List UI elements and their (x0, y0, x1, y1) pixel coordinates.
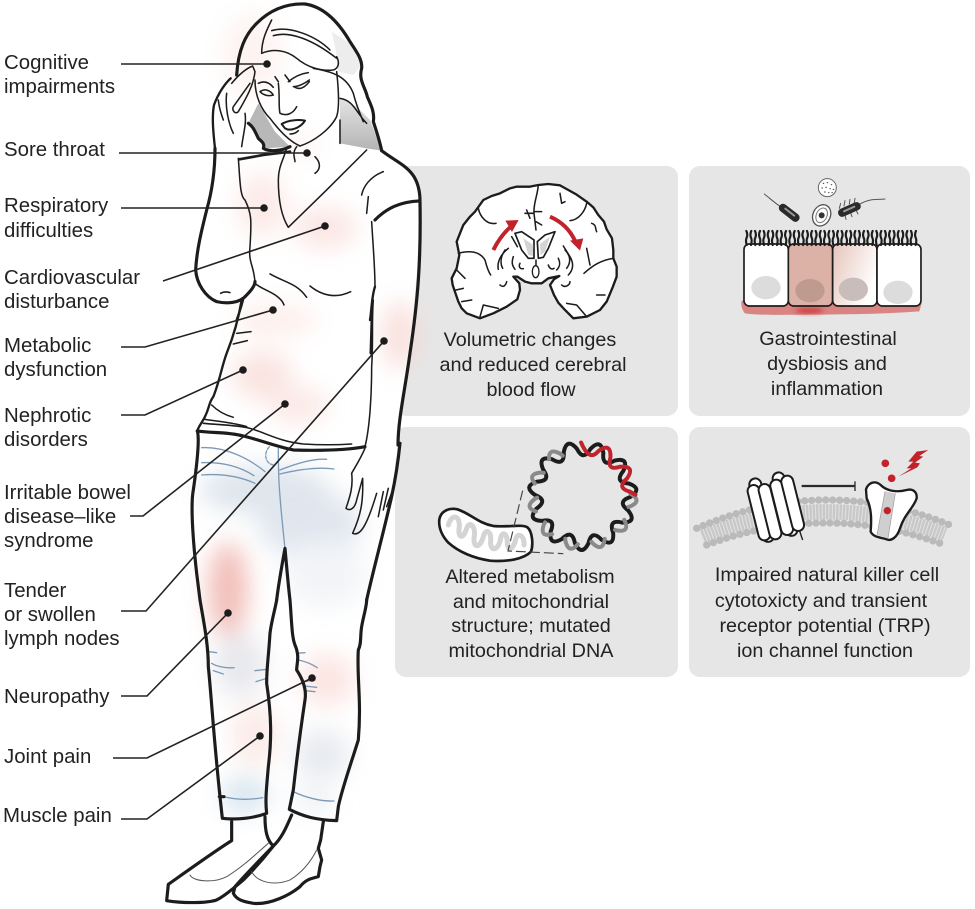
leader lines (113, 60, 388, 819)
arrow: right red (550, 217, 583, 251)
label: nephrotic disorders: Nephrotic (4, 405, 91, 427)
text: ion channel caption: receptor potential (TRP) (719, 615, 931, 637)
torso and thighs (192, 300, 400, 600)
text: brain caption (440, 329, 626, 401)
text: gut caption: Gastrointestinal (759, 328, 897, 350)
icon: red ions (881, 459, 895, 482)
microvilli (746, 231, 916, 245)
icon: mitochondrion (439, 509, 532, 561)
panel: gut (689, 166, 970, 416)
text: brain caption: blood flow (486, 379, 576, 401)
text: ion channel caption: ion channel function (737, 640, 913, 662)
label: irritable bowel: disease–like (4, 506, 116, 528)
label: cognitive impairments (4, 52, 115, 98)
label: neuropathy: Neuropathy (4, 686, 110, 708)
label: cardiovascular disturbance: disturbance (4, 291, 109, 313)
label: muscle pain: Muscle pain (3, 805, 112, 827)
symptom labels (3, 52, 140, 827)
text: ion channel caption (715, 564, 939, 662)
text: mitochondria caption (445, 566, 615, 662)
label: irritable bowel: syndrome (4, 530, 94, 552)
text: gut caption: dysbiosis and (767, 353, 887, 375)
head and raised arm (196, 4, 420, 320)
icon: rod bacterium right (837, 198, 885, 219)
label: metabolic dysfunction: Metabolic (4, 335, 91, 357)
text: brain caption: Volumetric changes (444, 329, 616, 351)
text: mitochondria caption: and mitochondrial (453, 591, 609, 613)
label: nephrotic disorders (4, 405, 91, 451)
right hand (346, 448, 393, 534)
label: respiratory difficulties (4, 195, 109, 242)
jean creases (202, 447, 334, 548)
label: lymph nodes (4, 580, 120, 650)
label: cardiovascular disturbance (4, 267, 140, 313)
icon: rod bacterium left (764, 194, 801, 223)
left shoe (167, 817, 273, 903)
right shoe (233, 815, 323, 903)
text: mitochondria caption: structure; mutated (451, 615, 611, 637)
icon: round microbe (818, 179, 836, 197)
label: nephrotic disorders: disorders (4, 429, 88, 451)
icon: membrane, receptor and TRP channel (697, 450, 950, 545)
label: cognitive impairments: impairments (4, 76, 115, 98)
icon: DNA ring (524, 436, 643, 555)
text: ion channel caption: cytotoxicty and transient (715, 590, 928, 612)
label: cognitive impairments: Cognitive (4, 52, 89, 74)
label: lymph nodes: Tender (4, 580, 67, 602)
label: respiratory difficulties: difficulties (4, 220, 93, 242)
panel: ion channel (689, 427, 970, 677)
label: lymph nodes: lymph nodes (4, 628, 120, 650)
label: metabolic dysfunction: dysfunction (4, 359, 107, 381)
text: gut caption: inflammation (771, 378, 883, 400)
label: sore throat: Sore throat (4, 139, 105, 161)
text: brain caption: and reduced cerebral (440, 354, 626, 376)
icon: oval cell (809, 202, 834, 229)
face (255, 72, 340, 173)
text: ion channel caption: Impaired natural killer cell (715, 564, 939, 586)
figure: woman with symptoms (167, 4, 420, 903)
label: respiratory difficulties: Respiratory (4, 195, 109, 217)
panel: brain (395, 166, 678, 416)
icon: TRP channel (866, 482, 917, 540)
icon: lightning bolt (898, 450, 928, 477)
label: metabolic dysfunction (4, 335, 107, 381)
symptom glows (199, 13, 418, 813)
label: irritable bowel: Irritable bowel (4, 482, 131, 504)
hand (213, 66, 255, 148)
icon: receptor helices (746, 471, 805, 543)
arrow: left red (493, 220, 519, 250)
label: cardiovascular disturbance: Cardiovascular (4, 267, 140, 289)
outer right arm (398, 202, 420, 445)
text: gut caption (759, 328, 897, 400)
icon: mitochondrial DNA and organelle (439, 436, 643, 561)
icon: gut epithelium and microbes (741, 179, 922, 315)
panel: mitochondria (395, 427, 678, 677)
icon: inhibition bar (802, 481, 855, 491)
text: mitochondria caption: mitochondrial DNA (449, 640, 614, 662)
icon: cell membrane (697, 500, 950, 545)
label: irritable bowel (4, 482, 131, 552)
lower legs and shoes (167, 600, 367, 903)
text: mitochondria caption: Altered metabolism (445, 566, 615, 588)
label: lymph nodes: or swollen (4, 604, 96, 626)
icon: brain cross-section (452, 184, 617, 318)
label: joint pain: Joint pain (4, 746, 91, 768)
